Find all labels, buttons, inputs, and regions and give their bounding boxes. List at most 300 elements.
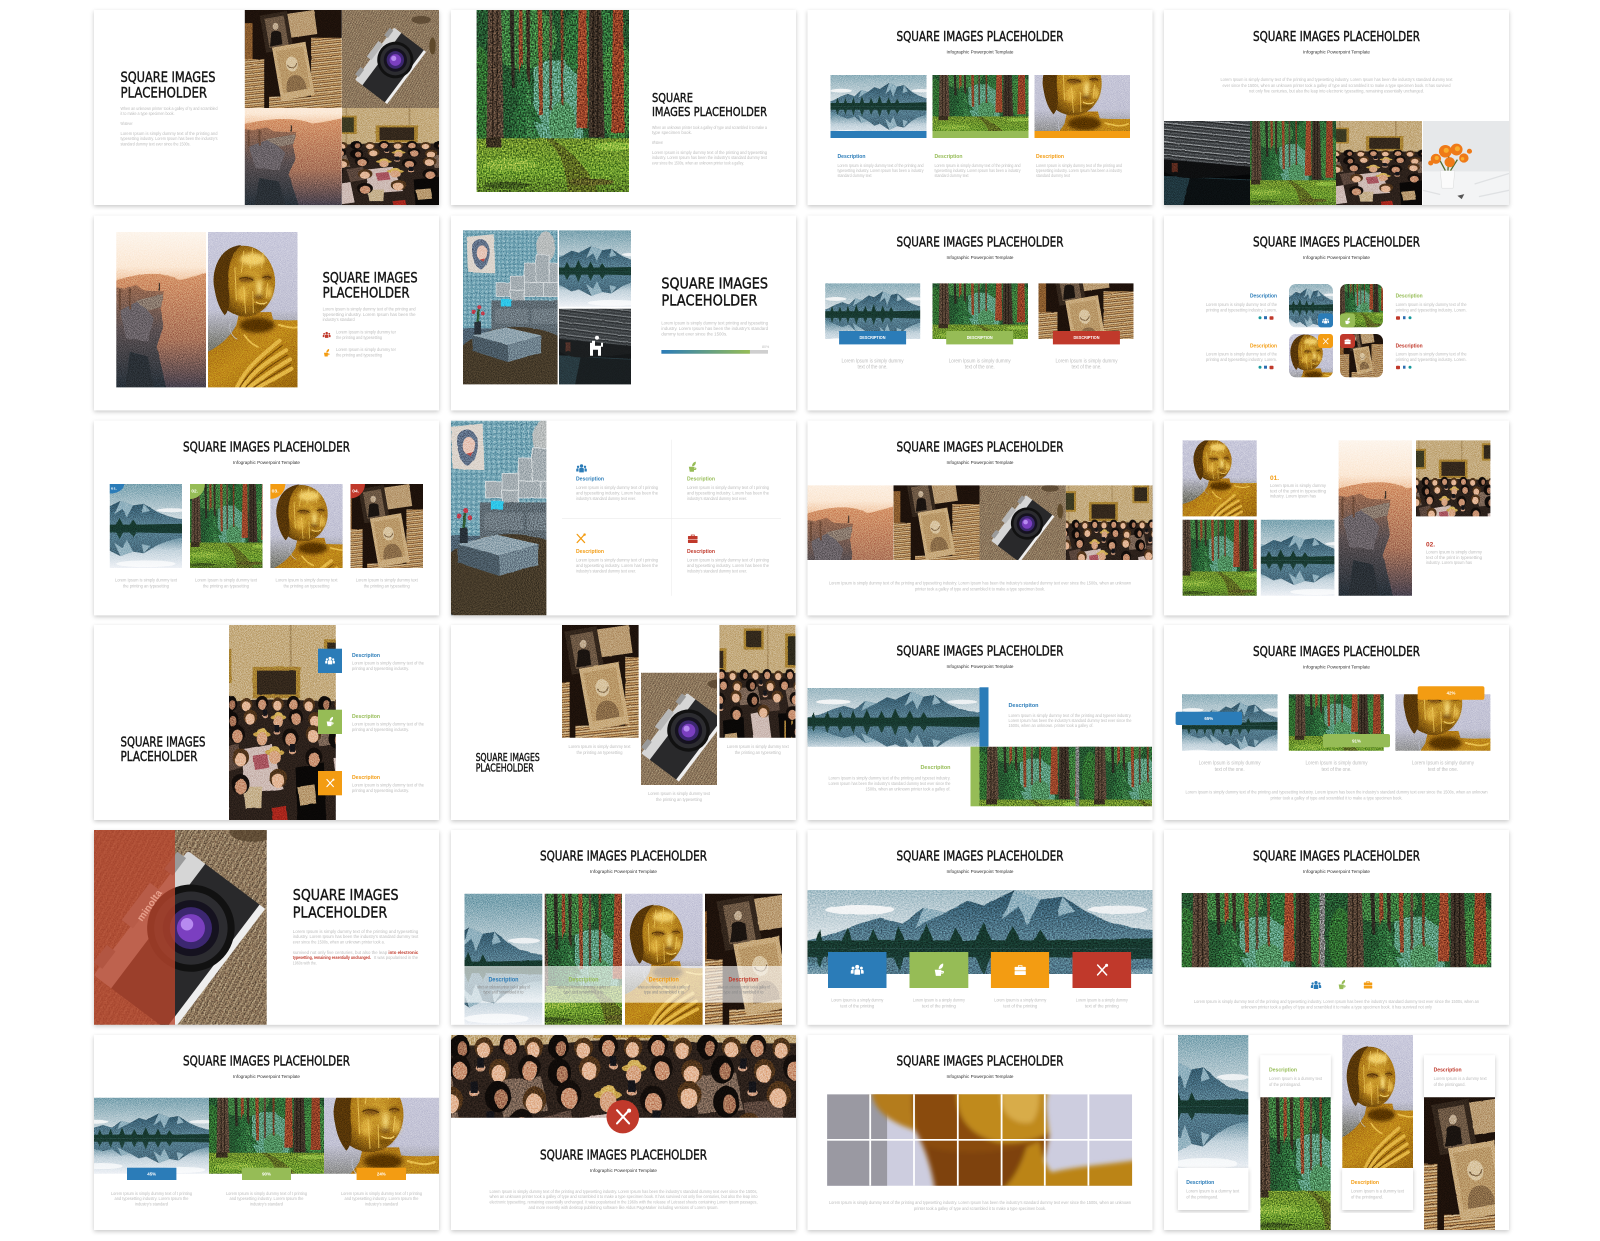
panel: slide 7 <box>808 216 1152 410</box>
photo: books <box>244 10 342 108</box>
value label: 24% <box>357 1168 406 1180</box>
heading: SQUARE IMAGES PLACEHOLDER <box>1253 236 1420 251</box>
photo: statue <box>208 232 298 388</box>
description right: Lorem Ipsum has been the industry's standard dummy text ever since the <box>1008 718 1132 723</box>
captions: text of the printing <box>922 1004 956 1008</box>
heading: SQUARE IMAGES PLACEHOLDER <box>896 850 1064 865</box>
photo: forest <box>200 1079 333 1188</box>
card 1 <box>1178 1168 1248 1210</box>
icon: people <box>1311 981 1321 989</box>
photo: lake <box>1059 1007 1260 1179</box>
heading: SQUARE IMAGES <box>323 270 418 286</box>
bullet text 2: Lorem Ipsum is simply dummy ter <box>336 347 397 352</box>
description left <box>828 765 951 792</box>
description 1 <box>838 154 924 178</box>
rounded photo: statue <box>1289 334 1333 378</box>
block: briefcase <box>687 535 770 574</box>
photo: boats with desk icon <box>552 292 638 393</box>
text block: industry. Lorem Ipsum has been the industry's standard dummy text <box>293 934 419 939</box>
block: people <box>576 464 659 501</box>
heading: PLACEHOLDER <box>476 763 534 775</box>
overlay text 3: Description <box>649 978 679 984</box>
text block: Lorem Ipsum is simply dummy text of the printing and <box>120 131 218 136</box>
block: tools: Description <box>576 549 605 555</box>
photo: lake <box>1260 520 1334 596</box>
captions: Lorem Ipsum is simply dummy text <box>115 578 178 583</box>
description 2 <box>934 154 1021 178</box>
panel: slide 3 <box>808 10 1152 210</box>
captions: Lorem Ipsum is a simply dummy <box>1076 998 1129 1002</box>
photo: lake <box>808 890 1152 974</box>
block: plant <box>687 462 770 501</box>
overlay text 2 <box>558 978 610 994</box>
caption 1: text of the one. <box>858 365 888 371</box>
heading: PLACEHOLDER <box>661 292 758 310</box>
column text 2: Lorem Ipsum is simply dummy text of t printing <box>226 1191 308 1196</box>
value label: 91%: 91% <box>1352 738 1361 743</box>
item 01: Lorem Ipsum is simply dummy <box>1270 483 1327 488</box>
description left: Lorem Ipsum is simply dummy text of the printing and typeset industry. <box>828 776 950 780</box>
card image: statue <box>1014 14 1152 210</box>
overlay text 4: when an unknown printer took a galley of <box>718 984 770 990</box>
value label: 24%: 24% <box>377 1172 386 1176</box>
panel: slide 24 <box>1059 1007 1553 1241</box>
text block: electronic typesetting, remaining essentially unchanged. It was popularised in the 1960s with the release of Letraset sheets containing Lorem Ipsum passages, <box>490 1200 758 1204</box>
photo: camera with red overlay: minolta <box>135 888 165 924</box>
heading: SQUARE IMAGES PLACEHOLDER <box>896 1055 1064 1070</box>
block: briefcase: industry's standard dummy text ever. <box>687 569 747 574</box>
text block: ever since the 1500s, when an unknown printer took a galley. <box>652 160 744 166</box>
item 3: printing and typesetting industry. <box>352 788 409 793</box>
card 2: Lorem Ipsum is a dummy text <box>1269 1076 1323 1081</box>
captions: Lorem Ipsum is simply dummy text <box>568 744 631 749</box>
photo: cliff <box>116 232 206 388</box>
photo: camera <box>641 672 717 785</box>
description left: Lorem Ipsum has been the industry's standard dummy text ever since the <box>828 781 951 786</box>
overlay band <box>464 966 782 1003</box>
photo: camera with red overlay <box>39 786 320 1066</box>
subtitle: Infographic Powerpoint Template <box>233 1074 300 1079</box>
photo: books <box>562 625 639 738</box>
description 2: Description <box>934 154 963 160</box>
panel: slide 9 <box>10 421 441 622</box>
card 02 <box>175 469 277 575</box>
block: people: industry's standard dummy text ever. <box>576 496 636 501</box>
overlay text 4: type and scrambled it to <box>724 990 764 994</box>
panel: slide 15 <box>799 625 1203 835</box>
text block: printer took a galley of type and scrambled it to make a type specimen book. <box>915 587 1045 592</box>
photo: statue <box>1182 440 1257 516</box>
text block: standard dummy text ever since the 1500s. <box>120 142 190 146</box>
card image: forest <box>925 58 1036 144</box>
heading: SQUARE IMAGES PLACEHOLDER <box>896 441 1064 456</box>
tile: tools <box>1072 952 1131 988</box>
photo: lake <box>559 230 631 307</box>
card 2: of the printingand. <box>1269 1082 1301 1087</box>
text block: typesetting industry. Lorem Ipsum has been the <box>323 312 416 317</box>
overlay text 2: type and scrambled it to <box>564 990 604 994</box>
description: bottom left: Lorem Ipsum is simply dummy text of the <box>1206 352 1278 357</box>
text block: it to make a type specimen book. <box>120 111 174 116</box>
value label: 90%: 90% <box>262 1172 271 1176</box>
panel: slide 20 <box>1164 830 1509 1025</box>
item 2: Lorem Ipsum is simply dummy text of the <box>352 722 425 726</box>
panel: slide 11 <box>94 615 439 825</box>
card 01: 01. <box>111 487 117 490</box>
captions: Lorem Ipsum is simply dummy text <box>356 578 418 583</box>
photo: statue <box>625 894 703 1025</box>
description 3 <box>1036 154 1123 178</box>
card: lake <box>815 262 931 353</box>
icon tile: tools <box>318 771 342 795</box>
card 04 <box>336 470 441 580</box>
text block: industry's standard <box>323 317 355 322</box>
description left: 1500s, when an unknown printer took a galley of. <box>866 786 950 792</box>
heading: PLACEHOLDER <box>120 750 198 765</box>
captions: the printing an typesetting <box>656 797 703 802</box>
captions: the printing an typesetting <box>735 750 781 755</box>
photo: forest <box>544 894 622 1025</box>
description: top left: printing and typesetting industry. Lorem. <box>1206 308 1277 313</box>
caption 3: Lorem Ipsum is simply dummy <box>1056 359 1118 365</box>
item 1: Lorem Ipsum is simply dummy text of the <box>352 660 425 666</box>
heading: SQUARE IMAGES PLACEHOLDER <box>896 236 1064 251</box>
panel: slide 1 <box>94 0 532 219</box>
text block: type specimen book. <box>652 130 692 135</box>
description 1: Description <box>838 154 866 160</box>
panel: slide 23 <box>808 1035 1152 1230</box>
value label: 65%: 65% <box>1204 716 1213 721</box>
item 01: text of the print in typesetting <box>1270 489 1327 494</box>
description: top right: Description <box>1396 294 1423 300</box>
card 3 <box>1342 1168 1413 1210</box>
captions: the printing an typesetting <box>123 584 170 589</box>
block: briefcase: Lorem Ipsum is simply dummy text of t printing <box>687 558 770 563</box>
block: briefcase: Description <box>687 549 716 555</box>
panel: slide 2 <box>451 0 796 207</box>
heading: SQUARE IMAGES PLACEHOLDER <box>1253 850 1420 865</box>
panel: slide 8 <box>1164 216 1509 422</box>
highlighted text block: survived not only five centuries, but also the leap into electronic <box>293 950 418 955</box>
overlay text 3: when an unknown printer took a galley of <box>638 984 690 990</box>
item 2: printing and typesetting industry. <box>352 727 409 732</box>
captions: Lorem Ipsum is simply dummy text <box>727 744 789 749</box>
heading: SQUARE IMAGES PLACEHOLDER <box>1253 30 1420 45</box>
photo: forest <box>1288 694 1384 751</box>
description: bottom right: printing and typesetting industry. Lorem. <box>1396 357 1467 362</box>
icon: briefcase <box>1364 981 1372 989</box>
block: people: and typesetting industry. Lorem has been the <box>576 491 659 496</box>
card 1: Description <box>1186 1180 1215 1186</box>
text block: Lorem Ipsum is simply dummy text of the printing and typesetting industry. Lorem Ipsum has been the industry's standard dummy text ever since the 1500s, when an unknown <box>829 581 1132 586</box>
text block: not only five centuries, but also the leap into electronic typesetting, remaining essentially unchanged. <box>1249 88 1424 94</box>
photo: cliff <box>1338 440 1412 596</box>
captions: text of the one. <box>1215 767 1245 773</box>
subtitle: Infographic Powerpoint Template <box>946 1074 1014 1079</box>
photo: lake <box>808 688 980 747</box>
text block: Lorem Ipsum is simply dummy text of the printing and typesetting industry. Lorem Ipsum has been the industry's standard dummy text ever since the 1500s, <box>490 1189 758 1194</box>
item 02: Lorem Ipsum is simply dummy <box>1426 550 1483 555</box>
item 3: Descripiton <box>352 775 381 781</box>
caption 2: Lorem Ipsum is simply dummy <box>949 359 1011 365</box>
icon: plant <box>1339 980 1346 989</box>
panel: slide 21 <box>65 1033 463 1241</box>
description 3: standard dummy text <box>1036 173 1071 178</box>
description: top right: Lorem Ipsum is simply dummy text of the <box>1396 302 1467 307</box>
icon: people <box>323 332 331 338</box>
panel: slide 13 <box>799 421 1196 630</box>
description 1: standard dummy text <box>838 173 872 178</box>
column text 2: and typesetting industry. Lorem Ipsum the <box>230 1196 304 1201</box>
text block: Whatever <box>652 140 663 145</box>
item 01: 01. <box>1270 475 1279 482</box>
overlay text 2: Description <box>568 978 599 984</box>
photo: flower <box>1423 121 1509 205</box>
description 3: typesetting industry. Lorem Ipsum has been a industry <box>1036 168 1123 173</box>
panel: slide 17 <box>39 786 439 1066</box>
heading: PLACEHOLDER <box>293 904 387 922</box>
card: forest: DESCRIPTION <box>967 335 993 340</box>
description: top left: Description <box>1250 294 1278 300</box>
photo: room <box>451 420 546 616</box>
card 2 <box>1260 1055 1331 1097</box>
description: bottom left: printing and typesetting industry. Lorem. <box>1206 357 1277 362</box>
photo: cliff <box>808 485 894 560</box>
value label: 91% <box>1323 734 1390 747</box>
captions: text of the one. <box>1322 767 1352 773</box>
card image: lake <box>820 53 937 145</box>
card 4 <box>1424 1055 1495 1097</box>
description 2: typesetting industry. Lorem Ipsum has been a industry <box>934 168 1021 173</box>
photo: books <box>705 894 782 1025</box>
photo: lake <box>65 1082 223 1179</box>
text block: Lorem Ipsum is simply dummy text of the printing and <box>323 307 416 312</box>
description: top right <box>1396 294 1467 320</box>
photo: forest <box>1250 121 1336 205</box>
icon tile: people <box>318 649 342 673</box>
value label: 42%: 42% <box>1447 691 1455 696</box>
overlay text 2: when an unknown printer took a galley of <box>558 984 610 990</box>
panel: slide 10 <box>434 408 796 653</box>
captions: text of the printing <box>1085 1004 1119 1008</box>
heading: SQUARE IMAGES <box>476 752 540 764</box>
overlay text 3: type and scrambled it to <box>644 990 684 994</box>
card 02: 02. <box>191 489 198 494</box>
subtitle: Infographic Powerpoint Template <box>590 1168 657 1173</box>
description 1: Lorem Ipsum is simply dummy text of the printing and <box>838 163 924 168</box>
item 02 <box>1426 542 1483 565</box>
captions: text of the printing <box>840 1004 875 1008</box>
column text 3: industry's standard <box>365 1202 399 1206</box>
captions: Lorem Ipsum is a simply dummy <box>913 998 966 1002</box>
description: bottom right <box>1396 343 1467 369</box>
panel: slide 14 <box>1164 417 1545 615</box>
text block: printer took a galley of type and scrambled it to make a type specimen book. <box>914 1206 1046 1211</box>
block: tools <box>576 534 659 574</box>
photo: crowd <box>720 625 796 738</box>
photo: crowd <box>1336 121 1422 205</box>
photo: boats <box>1164 121 1250 205</box>
photo: crowd <box>1416 440 1490 516</box>
photo: room <box>463 230 558 384</box>
description 2: standard dummy text <box>934 173 969 178</box>
block: tools: industry's standard dummy text ever. <box>576 569 636 574</box>
item 2 <box>352 714 425 732</box>
item 1 <box>352 653 425 671</box>
description left: Descripiton <box>920 765 951 771</box>
description: bottom right: Lorem Ipsum is simply dummy text of the <box>1396 352 1467 357</box>
description: top right: printing and typesetting industry. Lorem. <box>1396 308 1467 313</box>
captions: Lorem Ipsum is a simply dummy <box>831 998 884 1002</box>
text block: industry. Lorem Ipsum has been the industry's standard <box>661 326 769 331</box>
description: bottom right: Description <box>1396 343 1423 349</box>
panel: slide 18 <box>350 830 837 1051</box>
overlay text 1: Description <box>488 978 519 984</box>
panel: slide 22 <box>391 907 871 1238</box>
value label: 90% <box>242 1168 291 1180</box>
photo grid: statue close-up <box>827 1089 1137 1191</box>
text block: ever since the 1500s, when an unknown printer took a galley of type and scrambled it to make a type specimen book. It has survived <box>1222 83 1451 88</box>
captions: the printing an typesetting <box>364 584 410 589</box>
subtitle: Infographic Powerpoint Template <box>946 255 1014 260</box>
column text 2: industry's standard <box>250 1202 284 1206</box>
card: books <box>1032 258 1140 366</box>
description 3: Lorem Ipsum is simply dummy text of the printing and <box>1036 163 1123 168</box>
heading: SQUARE IMAGES PLACEHOLDER <box>896 30 1064 45</box>
text block: When an unknown printer took a galley of type and scrambled it to make a <box>652 125 767 130</box>
icon: tools badge <box>606 1100 639 1133</box>
card 3: Lorem Ipsum is a dummy text <box>1351 1188 1405 1194</box>
item 1: Descripiton <box>352 653 381 659</box>
captions: Lorem Ipsum is simply dummy text <box>195 578 258 583</box>
block: plant: industry's standard dummy text ever. <box>687 496 747 501</box>
item 3 <box>352 775 425 793</box>
card 03: 03. <box>272 488 279 494</box>
text block: Whatever <box>120 121 133 126</box>
highlighted text block: It was popularised in the <box>374 955 419 960</box>
text block: unknown printer took a galley of type and scrambled it to make a type specimen book. It has survived not only <box>1241 1004 1433 1010</box>
overlay text 3 <box>638 978 690 994</box>
text block: Lorem Ipsum is simply dummy text of the printing and typesetting industry. Lorem Ipsum has been the industry's standard dummy text ever since the 1500s, when an unknown <box>829 1200 1132 1205</box>
subtitle: Infographic Powerpoint Template <box>946 460 1014 465</box>
value label: 45%: 45% <box>147 1172 156 1176</box>
captions: Lorem Ipsum is simply dummy <box>1199 760 1261 766</box>
item 2: Descripiton <box>352 714 381 720</box>
photo: lake <box>464 894 542 1024</box>
text block: When an unknown printer took a galley of ty and scrambled <box>120 106 218 111</box>
block: plant: and typesetting industry. Lorem has been the <box>687 491 770 496</box>
item 01 <box>1270 475 1327 499</box>
photo: crowd <box>391 907 871 1238</box>
bullet text 2: the printing and typesetting <box>336 353 383 358</box>
column text 3: Lorem Ipsum is simply dummy text of t printing <box>341 1191 423 1196</box>
progress bar: 80% <box>762 345 770 349</box>
subtitle: Infographic Powerpoint Template <box>1303 255 1370 260</box>
card 4: Description <box>1434 1068 1462 1074</box>
item 02: industry. Lorem Ipsum has <box>1426 560 1472 565</box>
panel: slide 4 <box>1155 10 1511 213</box>
card: lake: DESCRIPTION <box>860 335 886 340</box>
card 3: Description <box>1351 1180 1380 1186</box>
description: top left <box>1206 294 1278 320</box>
captions: Lorem Ipsum is simply dummy text <box>648 791 711 796</box>
value label: 45% <box>127 1168 176 1180</box>
photo: books <box>1402 1088 1553 1239</box>
tile: people <box>828 952 886 988</box>
photo: forest <box>1182 520 1257 596</box>
text block: dummy text ever since the 1500s. <box>661 332 727 337</box>
description 3: Description <box>1036 154 1065 160</box>
photo: forest <box>1238 1087 1388 1241</box>
bullet text 1: Lorem Ipsum is simply dummy ter <box>336 330 397 335</box>
captions: Lorem Ipsum is simply dummy text <box>276 578 338 583</box>
overlay text 1 <box>478 978 530 994</box>
item 3: Lorem Ipsum is simply dummy text of the <box>352 782 425 788</box>
subtitle: Infographic Powerpoint Template <box>1303 869 1370 874</box>
value label: 65% <box>1176 712 1242 725</box>
photo: crowd <box>1066 485 1152 560</box>
caption 2: text of the one. <box>965 365 995 371</box>
captions: Lorem Ipsum is simply dummy <box>1412 760 1474 766</box>
photo: statue <box>300 1033 463 1241</box>
heading: PLACEHOLDER <box>323 286 410 302</box>
panel: slide 12 <box>451 611 820 820</box>
text block: Lorem Ipsum is simply dummy text of the printing and typesetting <box>293 929 419 934</box>
text block: typesetting industry. Lorem Ipsum has been the industry's <box>120 136 218 141</box>
photo: forest <box>980 746 1152 806</box>
text block: Lorem Ipsum is simply dummy text of the printing and typesetting <box>652 150 768 155</box>
panel: slide 6 <box>451 215 796 426</box>
subtitle: Infographic Powerpoint Template <box>1303 50 1370 54</box>
heading: SQUARE IMAGES PLACEHOLDER <box>1253 645 1420 660</box>
subtitle: Infographic Powerpoint Template <box>946 869 1014 874</box>
description right <box>1008 703 1132 728</box>
photo: books <box>894 485 980 560</box>
text block: ever since the 1500s, when an unknown printer took a. <box>293 940 385 944</box>
photo: cliff <box>244 108 342 205</box>
text block: Lorem Ipsum is simply dummy text of the printing and typesetting industry. Lorem Ipsum has been the industry's standard dummy text ever since the 1500s, when an unknown <box>1186 790 1488 794</box>
heading: SQUARE IMAGES PLACEHOLDER <box>183 1055 350 1070</box>
block: tools: Lorem Ipsum is simply dummy text of t printing <box>576 558 659 563</box>
rounded photo: forest <box>1340 284 1383 328</box>
item 01: industry. Lorem Ipsum has <box>1270 494 1316 499</box>
rounded photo: books <box>1340 334 1383 378</box>
highlighted text block: typesetting, remaining essentially unchanged. <box>293 955 371 960</box>
heading: SQUARE IMAGES PLACEHOLDER <box>183 440 350 455</box>
item 02: text of the print in typesetting <box>1426 555 1483 560</box>
bullet text 1: the printing and typesetting <box>336 335 383 340</box>
photo: camera <box>342 10 439 108</box>
icon tile: plant <box>318 710 342 734</box>
progress bar <box>661 345 770 354</box>
overlay text 4: Description <box>728 978 759 984</box>
heading: SQUARE IMAGES <box>120 70 216 86</box>
card 1: Lorem Ipsum is a dummy text <box>1186 1188 1240 1194</box>
heading: IMAGES PLACEHOLDER <box>652 104 767 119</box>
text block: Lorem Ipsum is simply dummy text of the printing and typesetting industry. Lorem Ipsum has been the industry's standard dummy text <box>1220 77 1453 82</box>
item 02: 02. <box>1426 542 1435 549</box>
description 1: typesetting industry. Lorem Ipsum has been a industry <box>838 168 924 173</box>
description: top left: Lorem Ipsum is simply dummy text of the <box>1206 302 1278 307</box>
subtitle: Infographic Powerpoint Template <box>590 869 657 874</box>
subtitle: Infographic Powerpoint Template <box>1303 664 1370 670</box>
caption 3: text of the one. <box>1072 365 1102 371</box>
column text 1: and typesetting industry. Lorem Ipsum the <box>114 1196 189 1201</box>
text block: industry. Lorem Ipsum has been the industry's standard dummy text <box>652 155 768 160</box>
block: people: Description <box>576 477 605 483</box>
overlay text 1: when an unknown printer took a galley of <box>478 984 530 990</box>
captions: the printing an typesetting <box>576 750 623 755</box>
